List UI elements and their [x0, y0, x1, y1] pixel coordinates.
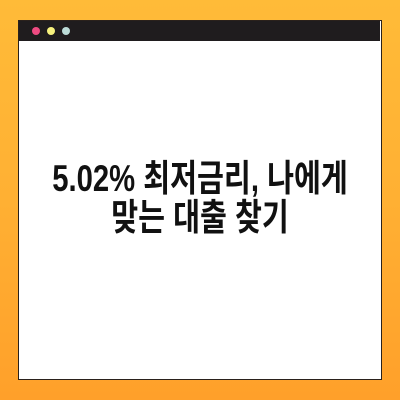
icon: light blue window dot [62, 27, 70, 35]
title: 맞는 대출 찾기 [111, 197, 289, 238]
title: 5.02% 최저금리, 나에게 [52, 158, 348, 199]
icon: yellow window dot [46, 27, 54, 35]
window title bar [19, 21, 380, 41]
icon: pink window dot [32, 27, 40, 35]
title [52, 158, 348, 238]
